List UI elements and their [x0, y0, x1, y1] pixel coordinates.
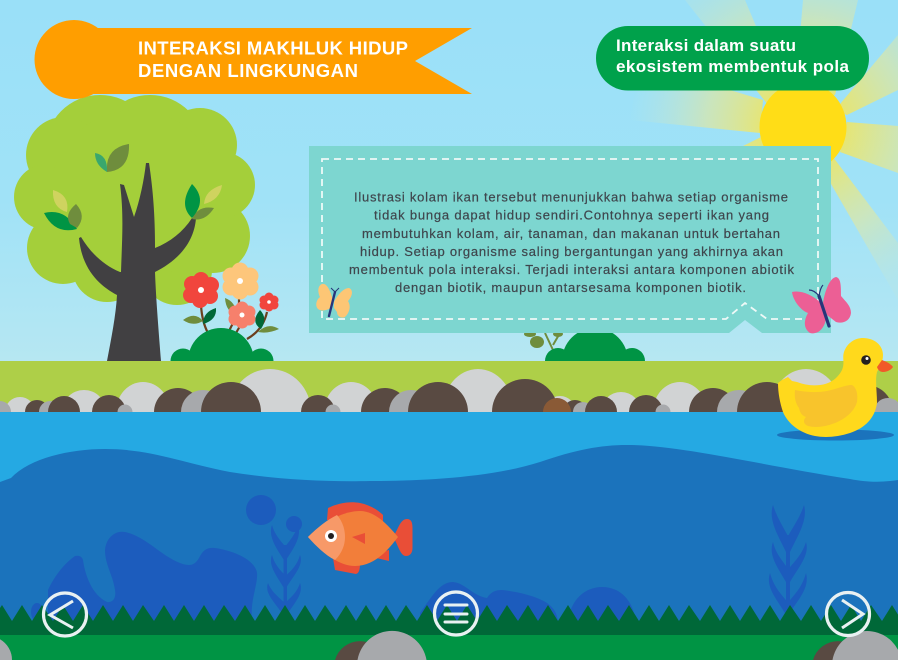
body text: Ilustrasi kolam ikan tersebut menunjukkan bahwa setiap organisme [354, 190, 788, 204]
subtitle text: Interaksi dalam suatu [616, 36, 796, 55]
title text [138, 38, 408, 81]
duck [777, 338, 894, 440]
duck eye [861, 355, 871, 365]
next button [826, 592, 870, 636]
sky [0, 0, 898, 362]
large coral blob [48, 532, 257, 625]
bottom fins [333, 550, 389, 574]
green subtitle pill [596, 26, 869, 90]
bubbles [246, 495, 302, 532]
flower leaves [183, 298, 279, 333]
subtitle text [616, 36, 850, 76]
green pond floor [0, 635, 898, 660]
tree [14, 95, 255, 361]
info panel [309, 146, 831, 333]
body text [349, 190, 794, 295]
stems [201, 298, 267, 339]
body text: hidup. Setiap organisme saling bergantungan yang akhirnya akan [360, 244, 783, 259]
body text: membutuhkan kolam, air, tanaman, dan makanan untuk bertahan [362, 226, 780, 241]
fish [308, 502, 412, 574]
pond water [0, 412, 898, 660]
tree leaves [44, 144, 222, 230]
shoreline rocks [0, 369, 898, 455]
previous button [44, 593, 86, 636]
orange butterfly [316, 284, 352, 318]
second bush [524, 328, 645, 394]
salmon flower [228, 302, 256, 328]
dorsal fin [327, 502, 383, 522]
subtitle text: ekosistem membentuk pola [616, 57, 850, 76]
flower bush [170, 262, 279, 394]
menu button [434, 592, 478, 635]
duck beak [877, 360, 893, 372]
tree trunk [79, 163, 196, 361]
pink butterfly [792, 277, 851, 333]
title text: INTERAKSI MAKHLUK HIDUP [138, 38, 408, 58]
ground [0, 361, 898, 413]
duck body [778, 338, 883, 437]
duck wing [795, 385, 857, 427]
bush [170, 328, 274, 394]
deep water wave [0, 445, 898, 660]
tree crown [14, 95, 255, 305]
body text: tidak bunga dapat hidup sendiri.Contohnya seperti ikan yang [374, 208, 769, 222]
side fin [352, 533, 365, 544]
body text: membentuk pola interaksi. Terjadi interaksi antara komponen abiotik [349, 262, 794, 277]
body text: dengan biotik, maupun antarsesama komponen biotik. [395, 280, 746, 295]
sun with rays [630, 0, 898, 300]
small seaweed stub left [31, 603, 43, 621]
title text: DENGAN LINGKUNGAN [138, 60, 358, 81]
tail fin [393, 519, 412, 556]
underwater plants [31, 495, 807, 625]
fish body [308, 511, 398, 566]
red flower [183, 272, 219, 308]
bottom rocks [0, 631, 898, 660]
fish face [308, 515, 345, 560]
eye [325, 530, 337, 542]
peach flower [222, 262, 258, 300]
small red flower [260, 292, 278, 312]
coral hump [568, 587, 636, 622]
seaweed right [769, 505, 807, 615]
seaweed left [267, 525, 301, 615]
orange title ribbon [34, 20, 472, 99]
coral center [420, 582, 558, 622]
duck shadow [777, 430, 894, 440]
grass teeth [0, 605, 898, 636]
